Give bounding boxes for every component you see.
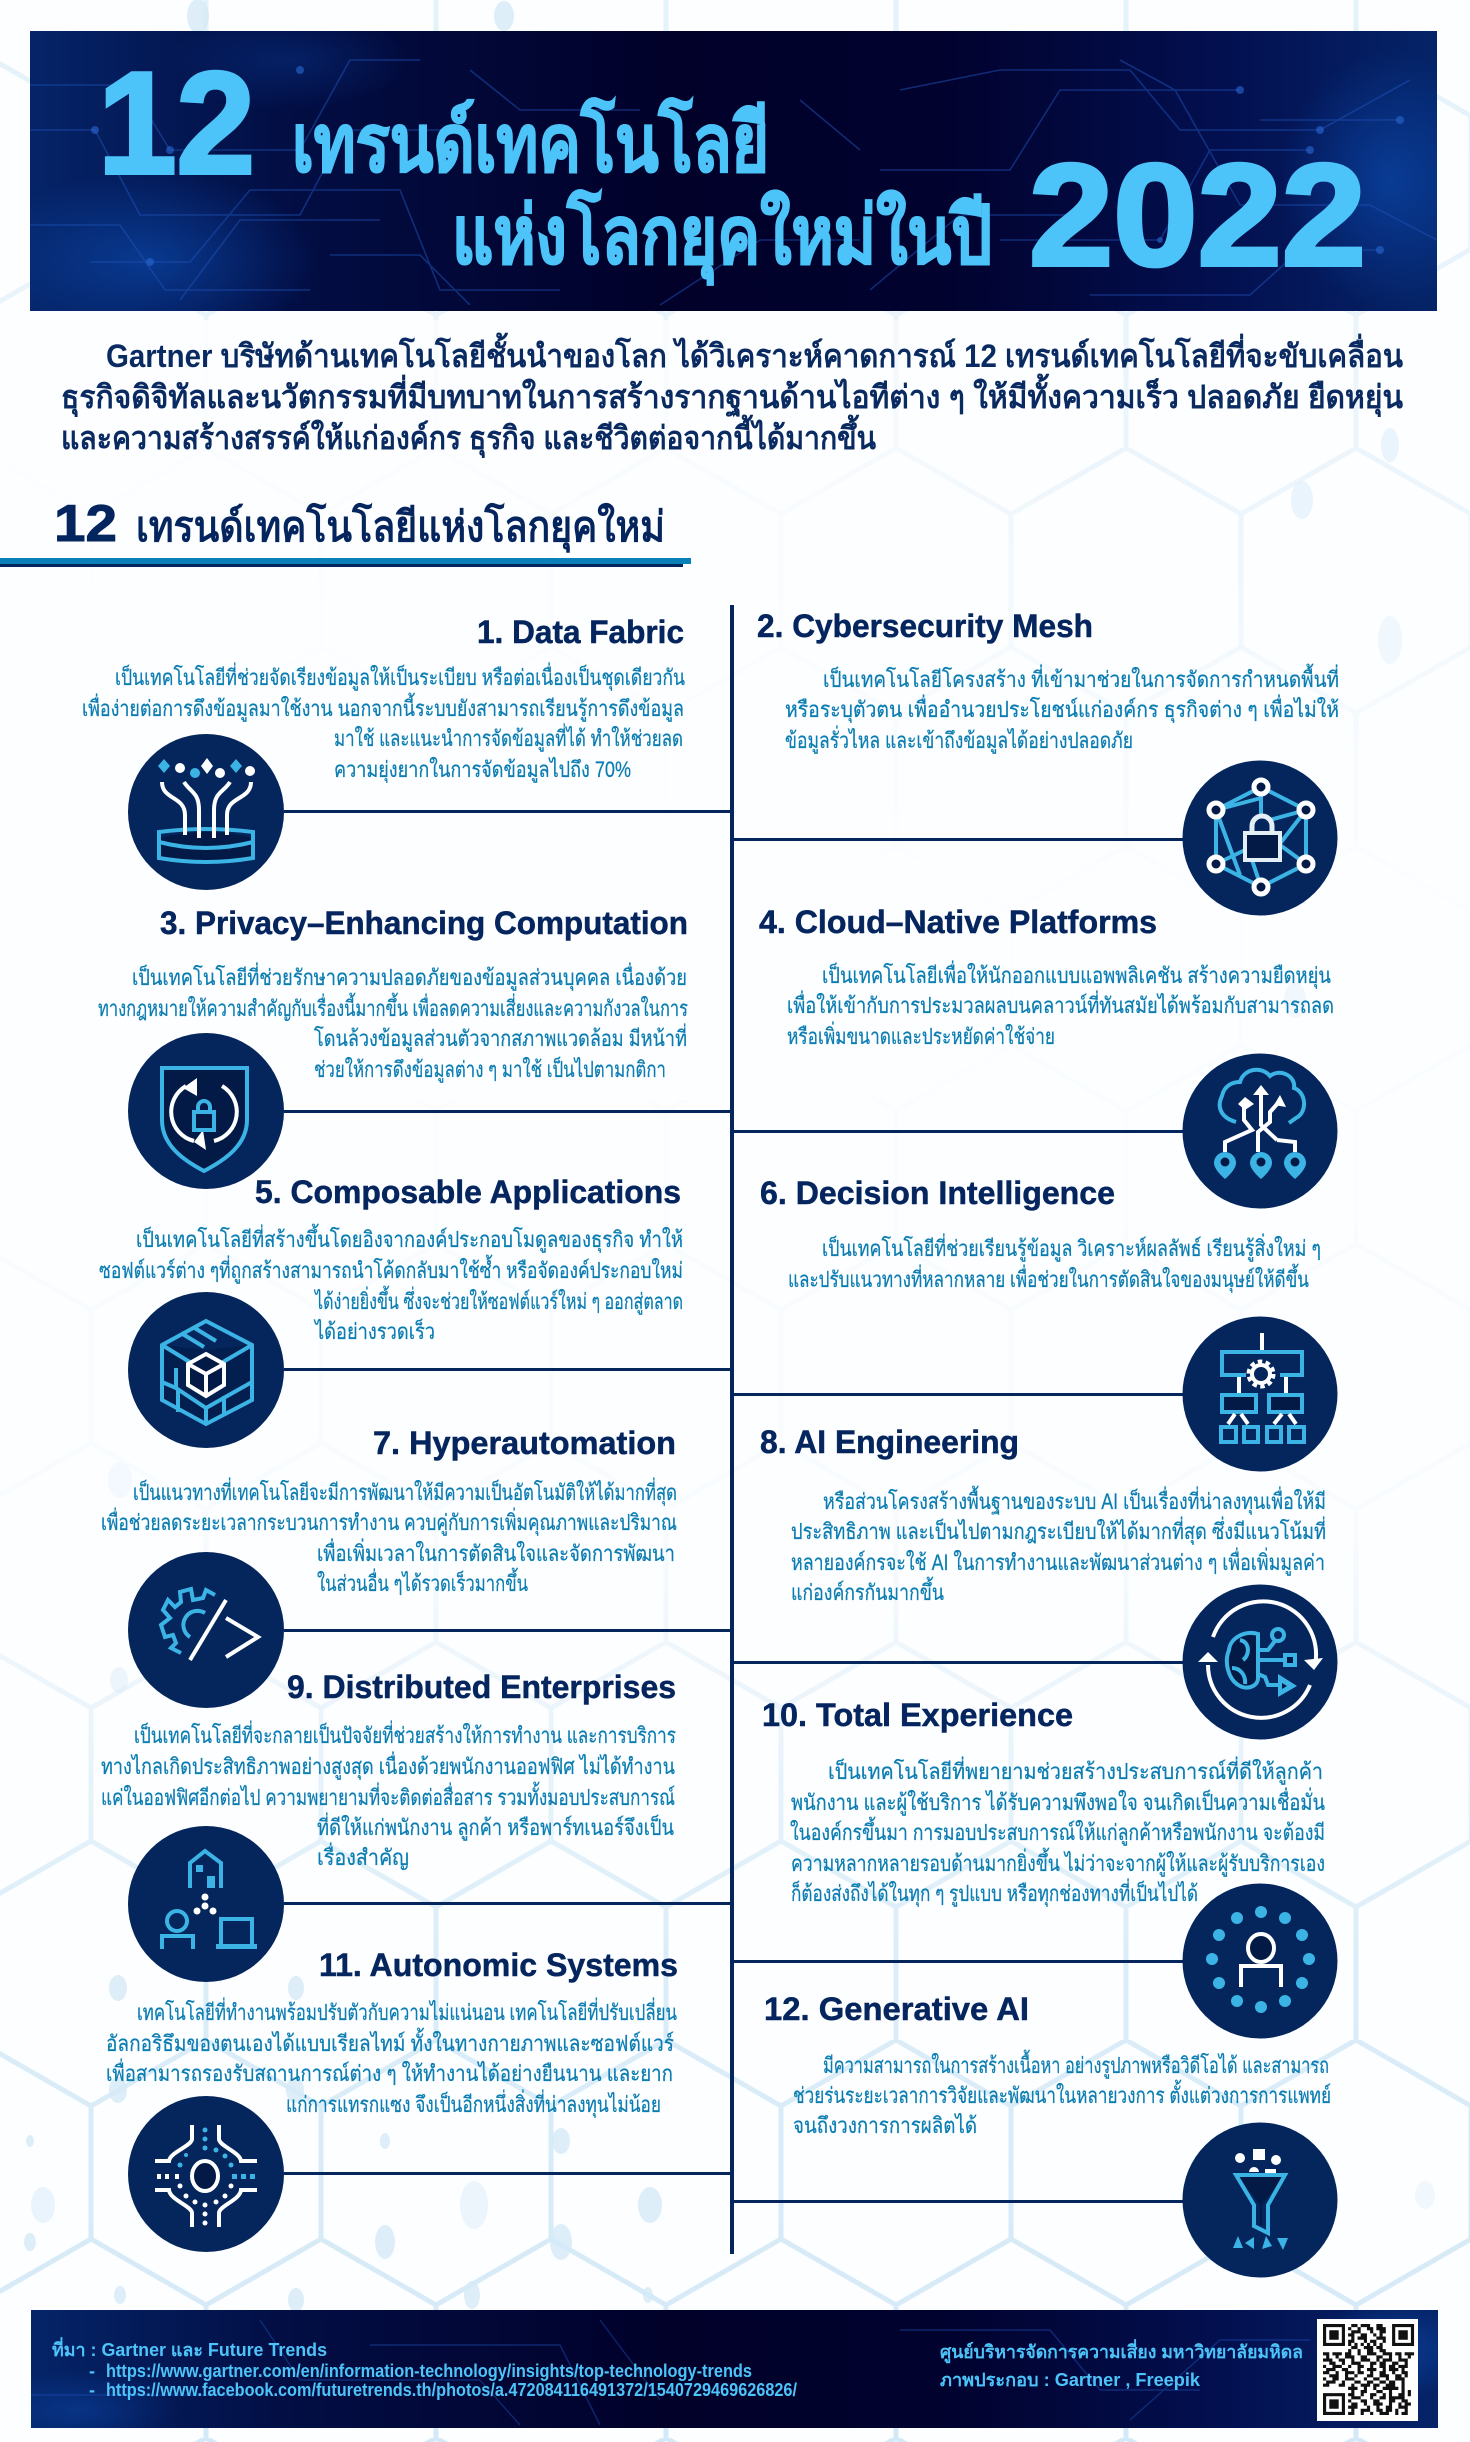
description: ก็ต้องส่งถึงได้ในทุก ๆ รูปแบบ หรือทุกช่องทางที่เป็นไปได้ (791, 1878, 1198, 1907)
description (82, 662, 685, 783)
description: เพื่อช่วยลดระยะเวลากระบวนการทำงาน ควบคู่กับการเพิ่มคุณภาพและปริมาณ (101, 1507, 677, 1536)
description: มาใช้ และแนะนำการจัดข้อมูลที่ได้ ทำให้ช่วยลด (334, 723, 683, 752)
panel: 7. Hyperautomation (101, 1425, 731, 1708)
icon: generative funnel (1182, 2122, 1338, 2278)
description: แก่องค์กรกันมากขึ้น (791, 1577, 944, 1605)
description: และปรับแนวทางที่หลากหลาย เพื่อช่วยในการตัดสินใจของมนุษย์ให้ดีขึ้น (788, 1264, 1309, 1293)
description: ซอฟต์แวร์ต่าง ๆที่ถูกสร้างสามารถนำโค้ดกลับมาใช้ซ้ำ หรือจัดองค์ประกอบใหม่ (99, 1255, 683, 1284)
description: ช่วยร่นระยะเวลาการวิจัยและพัฒนาในหลายวงการ ตั้งแต่วงการการแพทย์ (793, 2080, 1331, 2108)
description: หรือส่วนโครงสร้างพื้นฐานของระบบ AI เป็นเรื่องที่น่าลงทุนเพื่อให้มี (823, 1486, 1326, 1515)
heading: 6. Decision Intelligence (760, 1175, 1115, 1211)
icon: person with dots (1182, 1884, 1338, 2038)
connector (284, 1902, 731, 1905)
panel: 2. Cybersecurity Mesh (733, 608, 1339, 916)
heading: 2. Cybersecurity Mesh (757, 608, 1093, 644)
intro paragraph: ธุรกิจดิจิทัลและนวัตกรรมที่มีบทบาทในการสร้างรากฐานด้านไอทีต่าง ๆ ให้มีทั้งความเร็ว ปลอดภัย ยืดหยุ่น (61, 373, 1403, 418)
description: ในส่วนอื่น ๆได้รวดเร็วมากขึ้น (317, 1568, 528, 1596)
section heading: เทรนด์เทคโนโลยีแห่งโลกยุคใหม่ (136, 502, 665, 553)
source link two: - (89, 2380, 95, 2400)
title: line one: เทรนด์เทคโนโลยี (292, 96, 769, 188)
QR code (1317, 2319, 1418, 2421)
description (785, 664, 1339, 754)
description (99, 1224, 683, 1344)
panel: 5. Composable Applications (99, 1174, 731, 1448)
image credit: ภาพประกอบ : Gartner , Freepik (940, 2370, 1201, 2390)
section heading: 12 (54, 495, 117, 553)
description (106, 1997, 677, 2118)
section heading (0, 495, 691, 567)
description (791, 1486, 1326, 1605)
intro paragraph (61, 332, 1403, 459)
source link one: - (89, 2361, 95, 2381)
description: โดนล้วงข้อมูลส่วนตัวจากสภาพแวดล้อม มีหน้าที่ (314, 1023, 687, 1052)
heading: 11. Autonomic Systems (319, 1947, 678, 1983)
footer (31, 2310, 1438, 2428)
title: 12: 12 (98, 42, 255, 204)
heading: 10. Total Experience (762, 1697, 1073, 1733)
connector (733, 1960, 1183, 1963)
description: ข้อมูลรั่วไหล และเข้าถึงข้อมูลได้อย่างปลอดภัย (785, 725, 1133, 754)
description (98, 962, 688, 1083)
description: เป็นเทคโนโลยีที่พยายามช่วยสร้างประสบการณ์ที่ดีให้ลูกค้า (828, 1756, 1323, 1785)
connector (733, 1130, 1183, 1133)
connector (284, 810, 731, 813)
connector (733, 1393, 1183, 1396)
description: ที่ดีให้แก่พนักงาน ลูกค้า หรือพาร์ทเนอร์จึงเป็น (317, 1812, 674, 1841)
description (101, 1720, 676, 1870)
icon: cybersecurity mesh (1182, 760, 1338, 916)
description: อัลกอริธึมของตนเองได้แบบเรียลไทม์ ทั้งในทางกายภาพและซอฟต์แวร์ (106, 2028, 674, 2056)
description: เพื่อให้เข้ากับการประมวลผลบนคลาวน์ที่ทันสมัยได้พร้อมกับสามารถลด (787, 990, 1334, 1018)
connector (284, 1368, 731, 1371)
description: เรื่องสำคัญ (317, 1842, 409, 1870)
title: line two: แห่งโลกยุคใหม่ในปี (452, 188, 992, 286)
description: เพื่อเพิ่มเวลาในการตัดสินใจและจัดการพัฒนา (317, 1538, 675, 1566)
description: เป็นเทคโนโลยีโครงสร้าง ที่เข้ามาช่วยในการจัดการกำหนดพื้นที่ (823, 664, 1339, 692)
description: เพื่อสามารถรองรับสถานการณ์ต่าง ๆ ให้ทำงานได้อย่างยืนนาน และยาก (106, 2058, 673, 2086)
description: ได้อย่างรวดเร็ว (313, 1317, 435, 1344)
panel: 4. Cloud-Native Platforms (733, 904, 1338, 1208)
description: ได้ง่ายยิ่งขึ้น ซึ่งจะช่วยให้ซอฟต์แวร์ใหม่ ๆ ออกสู่ตลาด (314, 1286, 683, 1315)
heading: 8. AI Engineering (760, 1424, 1019, 1460)
icon: cloud native (1182, 1054, 1338, 1208)
icon: shield lock (128, 1033, 284, 1189)
panel: 9. Distributed Enterprises (101, 1669, 731, 1982)
heading: 7. Hyperautomation (373, 1425, 676, 1461)
icon: roundabout (128, 2096, 284, 2252)
description: เป็นเทคโนโลยีที่ช่วยจัดเรียงข้อมูลให้เป็นระเบียบ หรือต่อเนื่องเป็นชุดเดียวกัน (115, 662, 685, 691)
panel: 1. Data Fabric (82, 614, 731, 890)
panel: 11. Autonomic Systems (106, 1947, 731, 2252)
icon: AI brain cycle (1182, 1584, 1338, 1740)
intro paragraph: และความสร้างสรรค์ให้แก่องค์กร ธุรกิจ และชีวิตต่อจากนี้ได้มากขึ้น (61, 414, 876, 459)
description: ความหลากหลายรอบด้านมากยิ่งขึ้น ไม่ว่าจะจากผู้ให้และผู้รับบริการเอง (791, 1848, 1325, 1877)
source url two: https://www.facebook.com/futuretrends.th/photos/a.472084116491372/1540729469626826/ (106, 2380, 797, 2400)
panel: 3. Privacy-Enhancing Computation (98, 905, 731, 1189)
title: 2022: 2022 (1029, 134, 1366, 296)
description: เป็นเทคโนโลยีที่ช่วยเรียนรู้ข้อมูล วิเคราะห์ผลลัพธ์ เรียนรู้สิ่งใหม่ ๆ (822, 1233, 1321, 1262)
description (793, 2050, 1331, 2138)
heading: 12. Generative AI (764, 1991, 1029, 2027)
icon: composable cube (128, 1292, 284, 1448)
connector (733, 838, 1183, 841)
timeline spine (730, 605, 734, 2254)
description: เป็นเทคโนโลยีที่สร้างขึ้นโดยอิงจากองค์ประกอบโมดูลของธุรกิจ ทำให้ (136, 1224, 683, 1253)
connector (284, 2172, 731, 2175)
description: เป็นเทคโนโลยีที่จะกลายเป็นปัจจัยที่ช่วยสร้างให้การทำงาน และการบริการ (134, 1720, 676, 1748)
description: ทางกฎหมายให้ความสำคัญกับเรื่องนี้มากขึ้น เพื่อลดความเสี่ยงและความกังวลในการ (98, 993, 688, 1021)
description: หรือเพิ่มขนาดและประหยัดค่าใช้จ่าย (787, 1021, 1055, 1049)
heading: 9. Distributed Enterprises (287, 1669, 676, 1705)
description: เพื่อง่ายต่อการดึงข้อมูลมาใช้งาน นอกจากนี้ระบบยังสามารถเรียนรู้การดึงข้อมูล (82, 693, 684, 722)
description: ช่วยให้การดึงข้อมูลต่าง ๆ มาใช้ เป็นไปตามกติกา (314, 1055, 666, 1083)
icon: remote work (128, 1826, 284, 1982)
icon: decision tree with gear (1182, 1316, 1338, 1472)
description: แค่ในออฟฟิศอีกต่อไป ความพยายามที่จะติดต่อสื่อสาร รวมทั้งมอบประสบการณ์ (101, 1782, 675, 1810)
panel: 10. Total Experience (733, 1697, 1338, 2038)
description: เป็นเทคโนโลยีที่ช่วยรักษาความปลอดภัยของข้อมูลส่วนบุคคล เนื่องด้วย (132, 962, 687, 991)
heading: 1. Data Fabric (477, 614, 684, 650)
icon: gear and code (128, 1552, 284, 1708)
description: แก่การแทรกแซง จึงเป็นอีกหนึ่งสิ่งที่น่าลงทุนไม่น้อย (286, 2089, 661, 2118)
description: พนักงาน และผู้ใช้บริการ ได้รับความพึงพอใจ จนเกิดเป็นความเชื่อมั่น (791, 1787, 1325, 1816)
description: ทางไกลเกิดประสิทธิภาพอย่างสูงสุด เนื่องด้วยพนักงานออฟฟิศ ไม่ได้ทำงาน (101, 1751, 675, 1780)
connector (733, 2200, 1183, 2203)
heading: 5. Composable Applications (255, 1174, 681, 1210)
icon: data fabric (128, 734, 284, 890)
organisation credit: ศูนย์บริหารจัดการความเสี่ยง มหาวิทยาลัยมหิดล (940, 2339, 1303, 2364)
description: เป็นเทคโนโลยีเพื่อให้นักออกแบบแอพพลิเคชัน สร้างความยืดหยุ่น (822, 960, 1331, 989)
description: เป็นแนวทางที่เทคโนโลยีจะมีการพัฒนาให้มีความเป็นอัตโนมัติให้ได้มากที่สุด (133, 1477, 677, 1506)
description (787, 960, 1334, 1049)
panel: 6. Decision Intelligence (733, 1175, 1338, 1472)
description (101, 1477, 677, 1596)
description (788, 1233, 1321, 1293)
description: หลายองค์กรจะใช้ AI ในการทำงานและพัฒนาส่วนต่าง ๆ เพื่อเพิ่มมูลค่า (791, 1547, 1325, 1576)
sources heading: ที่มา : Gartner และ Future Trends (52, 2337, 327, 2360)
description: จนถึงวงการการผลิตได้ (793, 2113, 977, 2138)
description: เทคโนโลยีที่ทำงานพร้อมปรับตัวกับความไม่แน่นอน เทคโนโลยีที่ปรับเปลี่ยน (137, 1997, 677, 2025)
source url one: https://www.gartner.com/en/information-technology/insights/top-technology-trends (106, 2361, 752, 2381)
title banner (0, 10, 1470, 350)
panel: 8. AI Engineering (733, 1424, 1338, 1740)
heading: 3. Privacy–Enhancing Computation (160, 905, 688, 941)
connector (284, 1629, 731, 1632)
panel: 12. Generative AI (733, 1991, 1338, 2278)
description: หรือระบุตัวตน เพื่ออำนวยประโยชน์แก่องค์กร ธุรกิจต่าง ๆ เพื่อไม่ให้ (785, 694, 1339, 723)
heading: 4. Cloud–Native Platforms (759, 904, 1157, 940)
description: ในองค์กรขึ้นมา การมอบประสบการณ์ให้แก่ลูกค้าหรือพนักงาน จะต้องมี (790, 1817, 1325, 1846)
description (790, 1756, 1325, 1907)
connector (733, 1661, 1183, 1664)
description: ความยุ่งยากในการจัดข้อมูลไปถึง 70% (334, 757, 631, 783)
connector (284, 1110, 731, 1113)
description: ประสิทธิภาพ และเป็นไปตามกฎระเบียบให้ได้มากที่สุด ซึ่งมีแนวโน้มที่ (791, 1516, 1326, 1545)
